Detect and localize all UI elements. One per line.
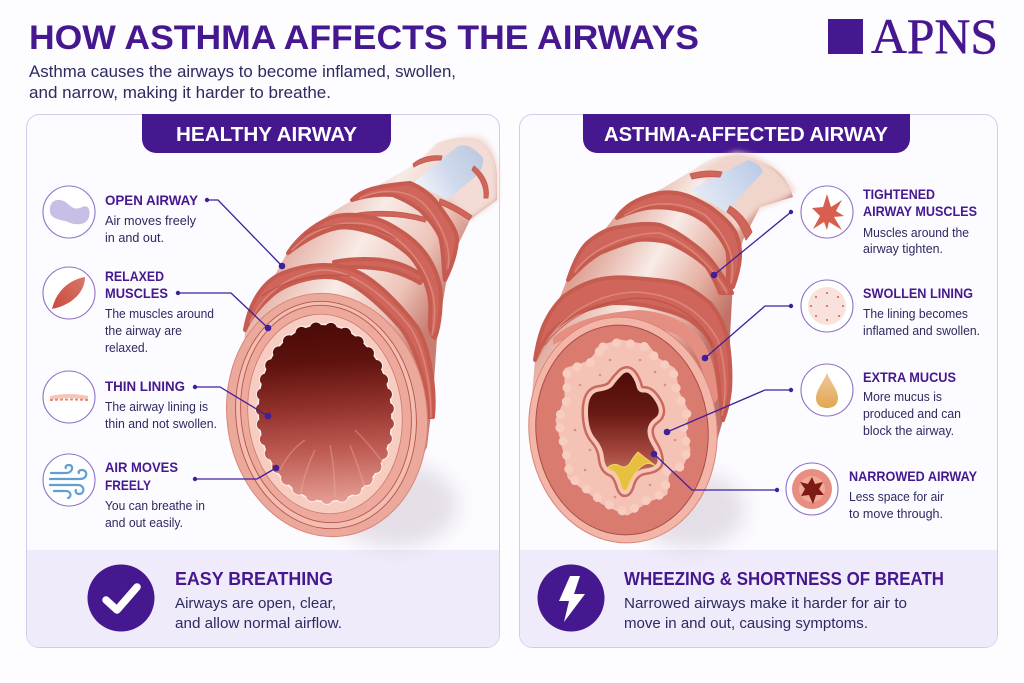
text: open airway: in and out. (105, 231, 164, 245)
header tab: asthma-affected airway: ASTHMA-AFFECTED AIRWAY (604, 124, 889, 146)
item: air moves freely (43, 454, 205, 530)
text: extra mucus: produced and can (863, 407, 961, 421)
text: thin lining (105, 378, 217, 431)
text: relaxed muscles: the airway are (105, 324, 182, 338)
text: swollen lining: inflamed and swollen. (863, 324, 980, 338)
text: relaxed muscles: RELAXED (105, 268, 164, 284)
text: easy breathing (175, 568, 342, 632)
text: relaxed muscles: MUSCLES (105, 285, 168, 301)
item: relaxed muscles (43, 267, 214, 355)
connector lines: healthy airway (176, 198, 285, 481)
text: narrowed airway (849, 468, 978, 521)
text: tightened airway muscles (863, 186, 977, 256)
text: air moves freely: You can breathe in (105, 499, 205, 513)
text: wheezing and shortness of breath: move in and out, causing symptoms. (624, 615, 868, 632)
icon: swollen lining (801, 280, 853, 332)
connector lines: asthma-affected airway (651, 210, 793, 492)
icon: check mark (88, 564, 154, 632)
text: wheezing and shortness of breath (624, 568, 944, 632)
airway opening with swollen lining (518, 308, 728, 552)
text: air moves freely (105, 459, 205, 530)
footer band: easy breathing (27, 550, 499, 647)
text: extra mucus (863, 369, 961, 438)
text: tightened airway muscles: airway tighten. (863, 242, 943, 256)
text: tightened airway muscles: AIRWAY MUSCLES (863, 203, 977, 219)
illustration: healthy airway tube (211, 136, 498, 550)
item: narrowed airway (786, 463, 978, 521)
icon: air flow (43, 454, 95, 506)
panel: asthma-affected airway (520, 114, 998, 648)
text: easy breathing: and allow normal airflow. (175, 615, 342, 632)
text: swollen lining: SWOLLEN LINING (863, 285, 973, 301)
text: tightened airway muscles: Muscles around the (863, 226, 969, 240)
text: relaxed muscles (105, 268, 214, 355)
item: thin lining (43, 371, 217, 431)
panel: healthy airway (26, 114, 500, 648)
icon: muscle (43, 267, 95, 319)
text: air moves freely: and out easily. (105, 516, 183, 530)
text: extra mucus: EXTRA MUCUS (863, 369, 956, 385)
text: narrowed airway: to move through. (849, 507, 943, 521)
text: wheezing and shortness of breath: Narrowed airways make it harder for air to (624, 595, 907, 612)
subtitle: Asthma causes the airways to become inflamed, swollen, (29, 63, 456, 81)
text: swollen lining (863, 285, 980, 338)
text: extra mucus: More mucus is (863, 390, 942, 404)
text: open airway: Air moves freely (105, 214, 197, 228)
text: relaxed muscles: relaxed. (105, 341, 148, 355)
text: open airway: OPEN AIRWAY (105, 192, 199, 208)
icon: tightened muscle star (801, 186, 853, 238)
icon: narrowed airway (786, 463, 838, 515)
text: wheezing and shortness of breath: WHEEZING & SHORTNESS OF BREATH (624, 568, 944, 589)
text: swollen lining: The lining becomes (863, 307, 968, 321)
footer band: wheezing (520, 550, 997, 647)
item: extra mucus (801, 364, 961, 438)
icon: thin lining (43, 371, 95, 423)
text: air moves freely: AIR MOVES (105, 459, 178, 475)
text: thin lining: The airway lining is (105, 400, 208, 414)
text: air moves freely: FREELY (105, 477, 152, 493)
item: swollen lining (801, 280, 980, 338)
icon: open airway (43, 186, 95, 238)
item: open airway (43, 186, 199, 245)
text: tightened airway muscles: TIGHTENED (863, 186, 935, 202)
header tab: healthy airway: HEALTHY AIRWAY (176, 124, 358, 146)
text: relaxed muscles: The muscles around (105, 307, 214, 321)
icon: mucus drop (801, 364, 853, 416)
header tab: asthma-affected airway (583, 114, 910, 153)
airway opening (211, 280, 443, 550)
text: narrowed airway: Less space for air (849, 490, 944, 504)
text: thin lining: thin and not swollen. (105, 417, 217, 431)
illustration: asthma-affected airway tube (518, 152, 795, 552)
mucus (607, 452, 656, 491)
text: open airway (105, 192, 199, 245)
text: extra mucus: block the airway. (863, 424, 954, 438)
subtitle (29, 63, 456, 102)
item: tightened airway muscles (801, 186, 977, 256)
text: narrowed airway: NARROWED AIRWAY (849, 468, 978, 484)
subtitle: and narrow, making it harder to breathe. (29, 84, 331, 102)
text: easy breathing: EASY BREATHING (175, 568, 333, 589)
text: easy breathing: Airways are open, clear, (175, 595, 336, 612)
title: HOW ASTHMA AFFECTS THE AIRWAYS (29, 19, 699, 57)
icon: lightning bolt (538, 564, 604, 632)
logo: APNS: APNS (871, 8, 998, 64)
header tab: healthy airway (142, 114, 391, 153)
text: thin lining: THIN LINING (105, 378, 185, 394)
